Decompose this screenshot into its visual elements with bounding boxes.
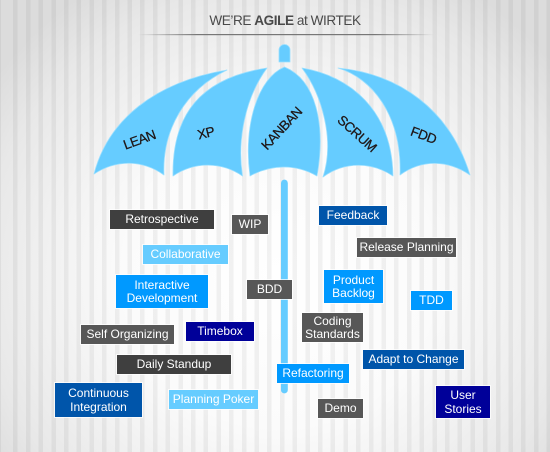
tag: Daily Standup <box>117 355 231 374</box>
tag: Planning Poker <box>169 390 258 408</box>
tag: Coding Standards: Coding <box>313 314 352 328</box>
canopy panel: FDD <box>338 68 470 175</box>
label: LEAN: LEAN <box>121 127 158 153</box>
tag: Retrospective <box>110 210 214 229</box>
tag: User Stories: User <box>450 388 476 402</box>
canopy panel: KANBAN <box>248 67 320 176</box>
tag: Demo: Demo <box>324 401 356 415</box>
tag: Refactoring: Refactoring <box>282 366 344 380</box>
tag: Adapt to Change: Adapt to Change <box>368 352 459 366</box>
tag: Planning Poker: Planning Poker <box>173 392 254 406</box>
tag: WIP <box>232 215 268 234</box>
tag: Feedback <box>319 206 387 225</box>
tag: Interactive Development: Interactive <box>134 278 190 292</box>
tag: WIP: WIP <box>239 217 261 231</box>
tag: Continuous Integration: Continuous <box>68 386 129 400</box>
umbrella handle <box>281 180 288 393</box>
tag: BDD: BDD <box>257 282 282 296</box>
tag: Product Backlog <box>324 270 383 303</box>
tag: Product Backlog: Backlog <box>332 286 375 300</box>
tag: Interactive Development: Development <box>127 291 197 305</box>
tag: Daily Standup: Daily Standup <box>137 357 211 371</box>
tag: Product Backlog: Product <box>333 273 374 287</box>
label: SCRUM: SCRUM <box>335 112 380 155</box>
tag: Adapt to Change <box>363 350 464 369</box>
tag: Retrospective: Retrospective <box>125 212 199 226</box>
tag: Continuous Integration <box>55 383 142 417</box>
tag: TDD: TDD <box>419 293 444 307</box>
tag: Interactive Development <box>116 275 208 308</box>
tag: Coding Standards: Standards <box>305 327 360 341</box>
tag: User Stories: Stories <box>444 402 482 416</box>
tag: Release Planning: Release Planning <box>359 240 454 254</box>
label: XP: XP <box>196 124 216 142</box>
tag: Timebox <box>186 322 254 341</box>
tag: Timebox: Timebox <box>197 324 243 338</box>
umbrella top cap <box>279 44 290 62</box>
canopy panel: SCRUM <box>302 68 393 177</box>
tag: Refactoring <box>277 364 349 383</box>
canopy panel: LEAN <box>94 70 227 175</box>
canopy panel: XP <box>173 68 267 176</box>
tag: Feedback: Feedback <box>327 208 379 222</box>
tag: BDD <box>247 280 292 299</box>
tag: User Stories <box>436 386 490 418</box>
tag: Continuous Integration: Integration <box>70 400 127 414</box>
canopy labels <box>121 104 439 155</box>
umbrella <box>94 44 470 393</box>
label: KANBAN: KANBAN <box>258 104 305 153</box>
tag: Collaborative <box>143 245 228 264</box>
tag: Self Organizing: Self Organizing <box>86 327 169 341</box>
tag: Self Organizing <box>81 325 174 344</box>
label: FDD: FDD <box>409 124 439 147</box>
tag: TDD <box>411 291 452 310</box>
title: WE’RE AGILE at WIRTEK <box>209 13 361 28</box>
tag: Demo <box>318 399 363 418</box>
tag: Coding Standards <box>302 313 363 342</box>
tag: Collaborative: Collaborative <box>150 247 221 261</box>
